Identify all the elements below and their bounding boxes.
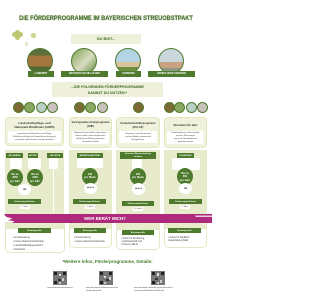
funding circle [130, 168, 146, 185]
icon: Verein [158, 48, 184, 74]
list [168, 236, 190, 242]
ribbon: BEWIRTSCHAFTUNG [80, 154, 100, 156]
ribbon: Kommune: KOMMUNE [122, 72, 135, 75]
ribbon: Kommune [116, 70, 141, 76]
ribbon: Bio-Anbau: BIO-ANBAU [9, 154, 20, 156]
description: Investitionen Maßnahmen der Pflege, [17, 132, 52, 134]
heading: folgende Förderprogramme [52, 82, 163, 97]
duration [85, 205, 95, 209]
description: Wiederherstellung und Entwicklung ökologisch [13, 136, 56, 138]
icon [164, 102, 175, 113]
ribbon [122, 230, 154, 235]
duration: 10 Jahre [134, 208, 142, 210]
ribbon: Bio-Anbau [6, 153, 23, 158]
circle: jährlich [135, 188, 142, 190]
QR code 1 [53, 271, 67, 285]
funding circle [177, 168, 193, 185]
description: und nachhaltig landwirtschaft [125, 136, 151, 138]
icon: Landwirt [27, 48, 53, 74]
list: Landwirtschaft und [122, 240, 142, 243]
list [74, 236, 105, 242]
panel heading: (KULAP) [133, 126, 143, 129]
funding circle [82, 168, 98, 185]
QR caption 3 [134, 286, 172, 292]
icon: Kommune [115, 48, 141, 74]
ribbon [74, 228, 106, 233]
icon: decorative leaves [12, 30, 36, 46]
funding circle: 135 [88, 172, 92, 176]
icon [36, 102, 47, 113]
panel body [5, 150, 64, 214]
title: DIE FÖRDERPROGRAMME IM BAYERISCHEN STREUOBSTPAKT [19, 15, 193, 22]
ribbon: Landwirt [28, 70, 54, 76]
ribbon: Landwirt: LANDWIRT [35, 72, 47, 75]
list: Entwicklung (ALE) [169, 239, 188, 242]
ribbon [168, 228, 201, 233]
heading: folgende Förderprogramme: ...DIE FOLGENDEN FÖRDERPROGRAMME [71, 84, 144, 88]
heading: du bist: DU BIST... [97, 36, 115, 41]
circle: jährlich [87, 187, 94, 189]
duration [133, 207, 143, 211]
funding circle: 600 [183, 175, 187, 178]
ribbon: Streuobst Bewirtschaftung [125, 152, 151, 154]
panel: Vertragsnaturschutz [69, 117, 112, 214]
funding circle [27, 169, 43, 186]
icon box [10, 158, 22, 169]
list: • Naturpark [13, 248, 25, 250]
panel heading: (VNP) [87, 125, 94, 128]
list: • Ernteberatung [74, 236, 91, 238]
duration [20, 205, 30, 209]
duration ribbon [8, 199, 41, 204]
icon box [132, 159, 142, 172]
funding circle: Bis zu [31, 172, 39, 176]
description: von hoch Streuobstbäume [174, 138, 197, 140]
funding circle: Bis zu [11, 172, 19, 176]
list [13, 236, 44, 250]
list: • Untere Naturschutzbehörde [13, 240, 44, 242]
yes circle: Ja [23, 187, 26, 191]
icon [24, 102, 35, 113]
description: gepflanzt werden [178, 140, 193, 142]
icon [174, 102, 185, 113]
description: Bäume sollen naturschutzfachlich [76, 134, 105, 136]
circle [84, 183, 97, 194]
heading: du bist [71, 34, 141, 44]
ribbon: Biotop [28, 153, 38, 158]
ribbon: Beratungsstelle [27, 230, 42, 232]
panel heading: Vertragsnaturschutzprogramm [72, 121, 109, 124]
circle [132, 183, 145, 195]
panel heading: Streuobst für alle! [174, 123, 197, 127]
panel: Berater 4 [164, 222, 207, 248]
description: Maßnahmen Pflege programms [76, 138, 105, 140]
funding circle: 2500 [12, 176, 18, 179]
panel: Berater 3 [116, 222, 160, 250]
icon: Besitzer Hochflächen [71, 48, 97, 74]
header strip [165, 223, 206, 229]
banner: wer berät mich: WER BERÄT MICH? [84, 216, 126, 221]
panel: Streuobst für alle [164, 117, 207, 214]
ribbon [120, 152, 156, 159]
QR caption 1: www.stmelf.bayern.de/foerderung [47, 287, 73, 289]
panel: Berater 1 [5, 222, 65, 253]
panel heading: Naturpark-Richtlinien (LNPR) [14, 125, 54, 129]
heading: folgende Förderprogramme: KANNST DU NUTZEN:* [88, 90, 127, 94]
duration: 5 Jahre [182, 206, 188, 208]
ribbon [77, 153, 103, 158]
ribbon: Biotop: BIOTOP [29, 154, 37, 156]
description: Biodiversität wertvoller Lebensräume [74, 132, 107, 134]
panel heading [72, 121, 110, 128]
panel header [69, 117, 112, 148]
description: wertvoller Lebensräume werden gefördert [15, 138, 54, 140]
icon [47, 102, 58, 113]
funding circle: pro Baum [132, 176, 144, 179]
list: • Untere Naturschutzbehörde [74, 240, 105, 242]
description: Streuobst erhalten [82, 140, 99, 142]
ribbon: Beratungsstelle [177, 230, 192, 232]
icon [186, 102, 197, 113]
banner: wer berät mich [4, 214, 212, 223]
description: Ertragsbäume [132, 138, 144, 140]
panel: Berater 2 [69, 222, 112, 248]
arrow line [53, 169, 54, 213]
duration: 5 Jahre [87, 206, 93, 208]
ribbon: PFLANZUNG [179, 154, 192, 156]
panel heading: Kulturlandschaftsprogramm [121, 122, 155, 125]
funding circle: 100 [136, 172, 140, 176]
small audience icons [13, 102, 208, 113]
duration ribbon [73, 199, 106, 204]
icon [85, 102, 96, 113]
list: • Ämter für ländliche [168, 236, 189, 239]
ribbon: Unö [47, 153, 63, 158]
ribbon: Besitzer [61, 70, 108, 76]
list: • Landschaftspflegeverband [13, 244, 43, 246]
icon [133, 102, 144, 113]
circle [179, 183, 192, 194]
icon [97, 102, 108, 113]
panel header [5, 117, 64, 146]
description: Streuobstbäume sollen erhalten [171, 132, 200, 134]
duration ribbon: Förderzeitpunkt/-dauer [79, 200, 100, 202]
duration ribbon: Förderzeitpunkt/-dauer [175, 200, 196, 202]
ribbon: Beratungsstelle [83, 230, 97, 232]
header strip [117, 223, 159, 230]
list [121, 236, 145, 246]
icon [13, 102, 24, 113]
panel: Kulturlandschaft [116, 117, 160, 214]
description [72, 131, 109, 144]
QR caption 2 [86, 286, 118, 292]
panel: Landschaftspflege [5, 117, 64, 214]
icon box [77, 158, 103, 168]
funding circle: pro Jahr [10, 180, 20, 183]
QR caption 2: foerderung/lnpr.html [86, 290, 101, 292]
icon [197, 102, 208, 113]
funding circle: pro Baum [84, 176, 96, 179]
description: Besonders umweltschonend [125, 132, 151, 134]
funding circle: Bis zu [181, 172, 189, 174]
panel body [116, 150, 160, 214]
duration [180, 205, 190, 209]
QR caption 3: www.stmelf.bayern.de/foerderung/streuobst/vertrag [134, 287, 172, 289]
heading: weitere Infos: *Weitere Infos, Förderprogramme, Details: [62, 259, 153, 264]
description [8, 131, 61, 143]
ribbon: Besitzer: BESITZER HOCHFLÄCHEN [69, 72, 100, 75]
yes circle [18, 184, 31, 195]
icon [74, 102, 85, 113]
icon box [49, 158, 58, 169]
description [167, 131, 204, 144]
ribbon: Beratungsstelle [131, 232, 145, 234]
duration: 5 Jahre [22, 206, 28, 208]
QR code 3 [151, 271, 165, 285]
funding circle [7, 169, 23, 186]
funding circle: pro Jahr [180, 179, 190, 182]
panel header [116, 117, 160, 148]
header strip [6, 223, 64, 229]
icon box [28, 158, 41, 169]
description [119, 131, 157, 143]
ribbon [18, 228, 51, 233]
funding circle: 1000 [32, 176, 38, 179]
ribbon: Unö: UNO.ENTE [50, 154, 60, 156]
list: • Ernteberatung [13, 236, 30, 238]
QR code 2 [99, 271, 113, 285]
ribbon [177, 153, 194, 158]
duration ribbon [169, 199, 202, 204]
duration ribbon: Förderzeitpunkt/-dauer [14, 200, 35, 202]
circle: Ja [184, 186, 187, 190]
panel heading [120, 122, 156, 129]
panel heading [14, 121, 54, 129]
panel body [164, 150, 207, 214]
ribbon: nutzbare [134, 156, 142, 158]
ribbon: Verein: VEREIN ODER VERBAND [157, 72, 186, 75]
duration ribbon: Förderzeitpunkt/-dauer [128, 202, 148, 204]
panel heading: Landschaftspflege- und [18, 121, 51, 125]
QR caption 3: snaturschutz/kulturlandschaft/index.html [134, 290, 164, 292]
list: Forsten (AELF) [122, 243, 138, 246]
ribbon: Verein [148, 70, 195, 76]
icon box [172, 158, 200, 170]
funding circle: pro Jahr [30, 180, 40, 183]
QR caption 2: www.stmuv.bayern.de/themen/naturschutz/ [86, 287, 118, 289]
header strip [70, 223, 111, 229]
panel body [69, 150, 112, 214]
description: und neu Pflanzungen [176, 134, 195, 136]
panel header [164, 117, 207, 148]
list: • Ämter für Ernährung, [121, 237, 145, 240]
duration ribbon [122, 201, 154, 206]
